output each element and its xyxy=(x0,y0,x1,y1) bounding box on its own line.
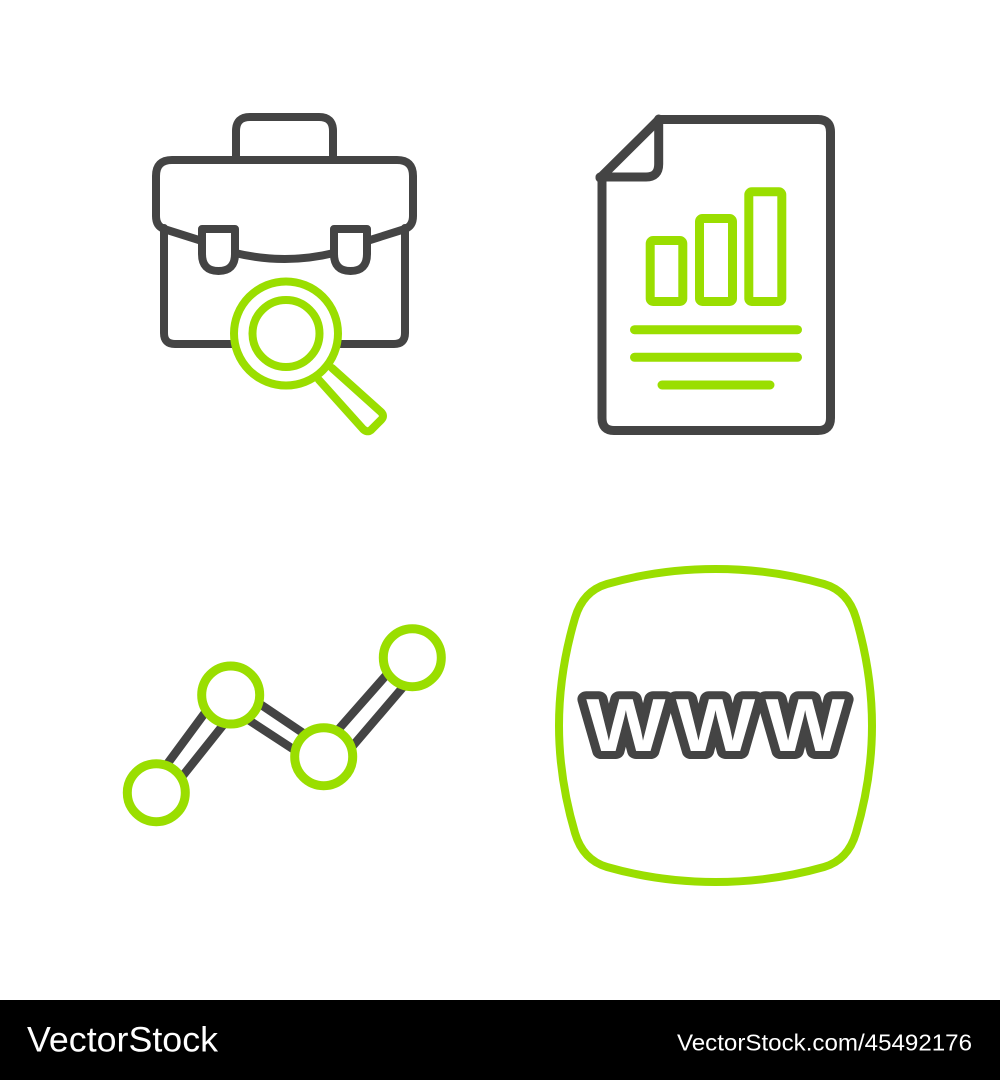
icon: www badge xyxy=(559,569,872,882)
footer logo: VectorStock xyxy=(27,1020,219,1060)
briefcase flap xyxy=(156,160,413,259)
badge outline xyxy=(559,569,872,882)
graph nodes xyxy=(127,629,441,822)
text lines xyxy=(634,330,798,385)
briefcase left clasp xyxy=(202,229,235,271)
footer bar xyxy=(0,1000,1000,1080)
document outline xyxy=(600,120,830,430)
footer url: VectorStock.com/45492176 xyxy=(677,1030,972,1056)
briefcase right clasp xyxy=(334,229,367,271)
bar chart xyxy=(650,192,782,302)
icon: line graph with nodes xyxy=(127,629,441,822)
briefcase body xyxy=(164,228,405,344)
www text: WWW xyxy=(586,683,846,767)
magnifying glass xyxy=(234,282,383,431)
briefcase handle xyxy=(236,117,333,160)
icon: briefcase with magnifying glass xyxy=(156,117,413,431)
icon: document with bar chart xyxy=(600,119,830,430)
graph connector lines xyxy=(165,672,404,778)
document folded corner xyxy=(600,119,659,177)
